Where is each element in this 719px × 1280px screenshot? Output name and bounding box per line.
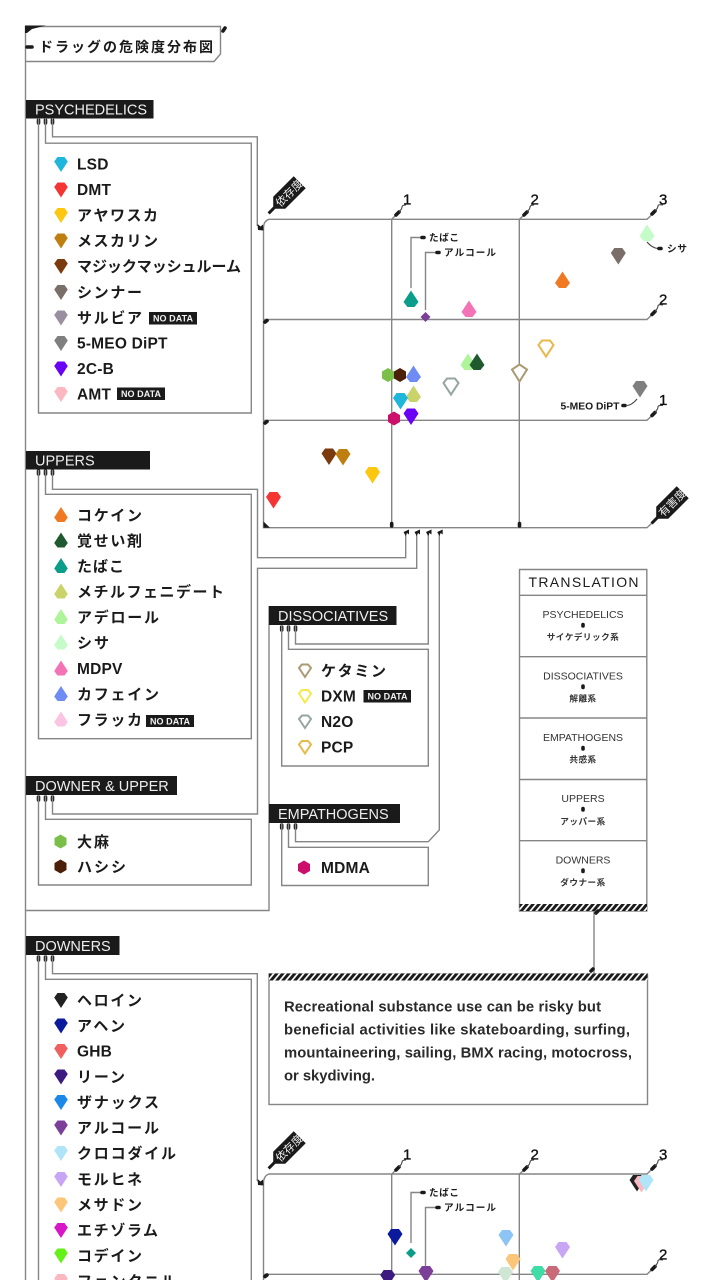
box outline [38,955,251,1280]
panel: translation [520,570,647,911]
legend row: DXM: NO DATA [368,692,408,702]
heading: uppers [26,451,150,474]
scale numbers: 2 [530,1146,539,1164]
note paragraph: Recreational substance use can be risky but [284,1000,601,1016]
translation: uppers [560,793,606,826]
heading: psychedelics [26,100,154,123]
legend row: stimulants: 覚せい剤 [77,532,142,550]
legend row: krokodil: クロコダイル [77,1144,176,1162]
translation: psychedelics: サイケデリック系 [547,631,619,642]
note paragraph: beneficial activities like skateboarding, surfing, [284,1022,630,1038]
legend row: AMT: AMT [77,386,112,404]
box outline [38,470,251,739]
scale numbers: 2 [659,1246,667,1264]
connector to chart x axis [296,534,439,842]
title box [25,26,225,62]
heading: downer and upper [26,776,177,800]
heading: translation: TRANSLATION [528,574,638,590]
legend row: N2O [299,714,353,731]
legend row: DMT [54,182,112,199]
note paragraph [284,1000,632,1084]
callout: tobacco: たばこ [429,1187,459,1199]
callout: 5-MEO DiPT: 5-MEO DiPT [560,402,620,412]
legend row: MDMA [298,860,370,877]
translation frame [520,570,647,911]
scale numbers: 1 [403,192,411,208]
legend row: tobacco [54,558,124,576]
legend row: adderall: アデロール [77,608,159,626]
legend row: cannabis [54,833,109,851]
legend row: AMT [54,386,165,404]
connector to chart x axis [52,470,406,558]
callout: tobacco: たばこ [429,232,459,244]
translation: dissociatives [543,670,623,704]
legend row: opium [54,1018,125,1035]
legend row: flakka: NO DATA [150,716,190,726]
heading: empathogens [269,804,400,828]
legend row: salvia [54,309,197,327]
legend row: DXM: DXM [321,688,356,706]
legend row: AMT: NO DATA [121,389,162,399]
legend row: GHB: GHB [77,1044,112,1060]
heading: downers: DOWNERS [35,939,111,955]
arrowheads into chart 1 x axis [404,530,443,536]
legend row: hashish [54,859,126,876]
legend row: flakka [54,712,194,729]
legend row: N2O: N2O [321,714,353,731]
heading: dissociatives [269,606,396,630]
scale numbers: 2 [659,292,667,308]
legend row: opium: アヘン [77,1018,125,1035]
heading: downers [26,936,120,960]
axis tag: harm: 有害度 [656,486,689,519]
legend row: lean: リーン [77,1069,125,1086]
axis tag: dependence: 依存度 [273,176,306,209]
scale numbers: 3 [659,1146,667,1164]
panel: downer and upper [26,534,417,885]
main left spine line [24,26,26,1280]
axis tag: dependence: 依存度 [273,1131,306,1164]
legend row: DMT: DMT [77,182,112,199]
arrowhead into chart 2 y axis [258,1179,264,1186]
legend row: salvia: NO DATA [153,314,194,324]
legend row: LSD: LSD [77,156,109,174]
box outline [38,118,251,413]
legend row: thinner: シンナー [77,284,142,302]
data markers [266,224,654,508]
legend row: salvia: サルビア [77,309,142,327]
heading: empathogens: EMPATHOGENS [278,807,389,823]
legend row: MDMA: MDMA [321,860,370,877]
data markers [380,1175,654,1280]
connector to chart x axis [52,534,417,814]
translation: downers: ダウナー系 [560,876,606,888]
translation: empathogens [543,732,623,764]
axis tag: harm [646,485,690,529]
panel: empathogens [269,534,439,886]
connector to chart 2 [52,955,257,1181]
legend row: ketamine: ケタミン [321,663,386,680]
hatch band [520,904,647,911]
callout: tobacco [411,1187,459,1243]
heading: dissociatives: DISSOCIATIVES [278,609,388,625]
legend row: methadone: メサドン [77,1197,142,1214]
translation: dissociatives: DISSOCIATIVES [543,670,623,682]
callout: shisha [647,242,687,255]
translation: downers [556,854,610,888]
heading: uppers: UPPERS [35,454,95,470]
legend row: tobacco: たばこ [77,558,124,576]
panel: dissociatives [269,534,428,766]
connector to chart 1 [52,118,257,226]
box outline [282,823,428,886]
legend row: methylphenidate: メチルフェニデート [77,583,224,601]
legend row: stimulants [54,532,142,550]
chart 2 axes and grid [264,1170,651,1280]
heading: psychedelics: PSYCHEDELICS [35,102,147,118]
connector to chart x axis [296,534,428,644]
axis tag: dependence [263,175,307,219]
legend row: 2C-B [54,361,114,378]
legend row: cocaine: コケイン [77,508,142,524]
chart 1 axis ticks and nodes [264,205,663,528]
legend row: xanax: ザナックス [77,1094,159,1112]
callout: tobacco [411,232,459,288]
scale numbers: 1 [403,1146,411,1164]
legend row: codeine [54,1247,142,1265]
box outline [282,625,428,766]
callout: alcohol: アルコール [444,248,496,259]
legend row: cannabis: 大麻 [77,833,109,851]
translation: uppers: アッパー系 [560,816,606,826]
box outline [38,795,251,885]
routing line from dissociatives to spine [26,606,269,910]
legend row: 2C-B: 2C-B [77,361,114,378]
callout: alcohol: アルコール [444,1203,496,1214]
panel: note text [269,974,648,1104]
panel: uppers [26,451,406,739]
note paragraph: or skydiving. [284,1068,375,1084]
legend row: GHB [54,1044,112,1060]
callout: 5-MEO DiPT [560,399,637,412]
translation: dissociatives: 解離系 [569,692,597,704]
legend row: ayahuasca: アヤワスカ [77,208,158,224]
translation: psychedelics [542,609,624,642]
chart 1: dependence vs harm [258,175,690,536]
callout: alcohol [426,1203,496,1266]
legend row: etizolam: エチゾラム [77,1222,158,1240]
chart 2: dependence vs harm, downers [258,1130,667,1280]
translation: empathogens: EMPATHOGENS [543,732,623,744]
legend row: magic mushroom: マジックマッシュルーム [77,258,241,276]
legend row: MDPV: MDPV [77,661,123,678]
translation: uppers: UPPERS [561,793,605,805]
legend row: 5-MEO DiPT: 5-MEO DiPT [77,336,168,352]
legend row: PCP: PCP [321,740,353,756]
axis tag: dependence [263,1130,307,1174]
scale numbers [403,192,667,409]
arrowhead into chart 1 y axis [258,224,264,230]
scale numbers: 2 [530,192,539,208]
legend row: morphine: モルヒネ [77,1172,142,1188]
legend row: heroin: ヘロイン [77,992,142,1010]
scale numbers: 1 [659,392,667,409]
panel: psychedelics [26,100,257,413]
scale numbers: 3 [659,192,667,208]
legend row: LSD [54,156,109,174]
title box: ドラッグの危険度分布図 [39,39,213,55]
translation: downers: DOWNERS [556,854,610,866]
callout: shisha: シサ [667,244,687,255]
panel: downers [26,936,257,1280]
heading: downer and upper: DOWNER & UPPER [35,779,169,795]
legend row: mescaline: メスカリン [77,233,158,250]
legend row: flakka: フラッカ [77,712,142,729]
translation: psychedelics: PSYCHEDELICS [542,609,624,621]
callout: alcohol [426,248,496,310]
legend row: caffeine: カフェイン [77,686,159,704]
legend row: shisha [54,634,109,652]
scale numbers [403,1146,667,1264]
legend row: codeine: コデイン [77,1247,142,1265]
legend row: lean [54,1069,125,1086]
chart 1 axes and grid [264,216,652,528]
connector: translation to note [591,911,598,973]
legend row: hashish: ハシシ [77,859,126,876]
legend row: DXM [299,688,411,706]
legend row: alcohol: アルコール [77,1120,159,1137]
note paragraph: mountaineering, sailing, BMX racing, motocross, [284,1046,632,1062]
legend row: shisha: シサ [77,635,109,652]
chart 2 axis ticks [265,1160,663,1276]
legend row: PCP [299,740,353,756]
legend row: MDPV [54,660,123,678]
translation: empathogens: 共感系 [569,754,597,764]
